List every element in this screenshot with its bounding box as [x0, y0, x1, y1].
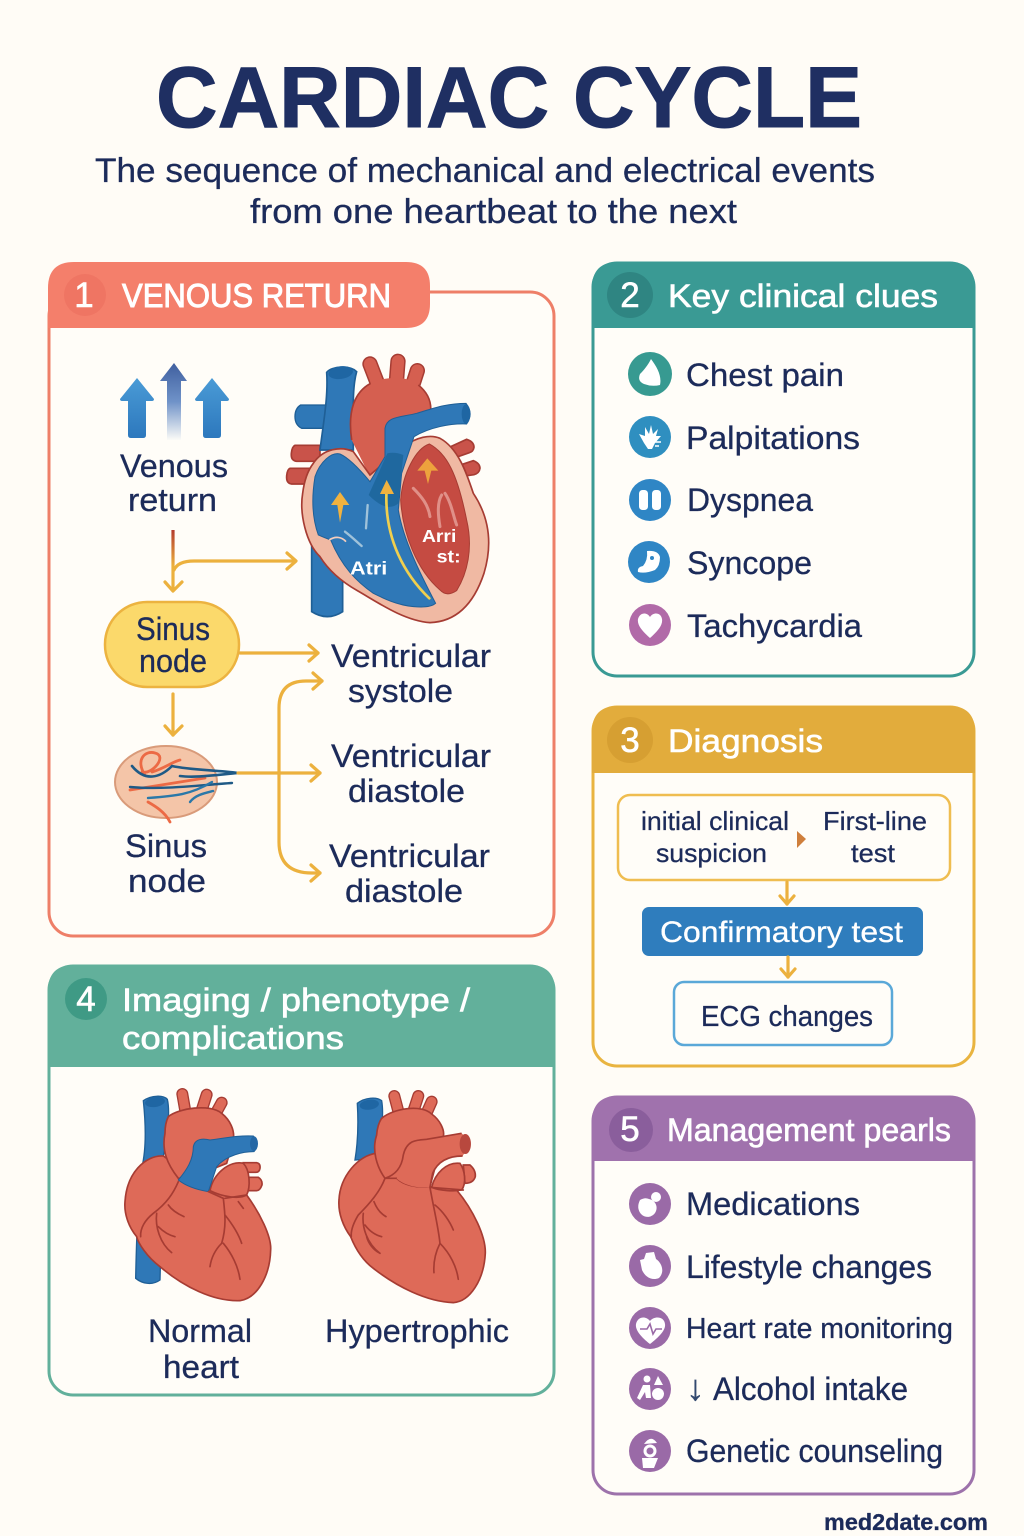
- panel 3 header: [592, 706, 975, 773]
- flow box: initial suspicion and first-line test: suspicion: [656, 838, 767, 868]
- item: genetic counseling: [629, 1430, 943, 1472]
- panel 1: venous return: [48, 262, 554, 936]
- flow box: confirmatory test: [642, 907, 923, 956]
- item: chest pain: Chest pain: [686, 357, 844, 393]
- flow box: initial suspicion and first-line test: First-line: [823, 806, 927, 836]
- panel 2 header: 2: [620, 276, 640, 315]
- label: ventricular diastole second: diastole: [345, 873, 463, 909]
- item: medications: Medications: [686, 1186, 860, 1222]
- anatomical heart cross-section: st:: [437, 547, 461, 567]
- anatomical heart cross-section: Arri: [422, 526, 456, 546]
- label: sinus node: Sinus: [125, 828, 207, 864]
- illustration: normal heart: [125, 1094, 271, 1301]
- item: tachycardia: Tachycardia: [687, 608, 862, 644]
- item: lifestyle changes: Lifestyle changes: [686, 1249, 932, 1285]
- panel 4 header: complications: [122, 1020, 344, 1056]
- arrow: fibres to ventricular diastole: [238, 765, 320, 781]
- item: palpitations: Palpitations: [686, 420, 860, 456]
- panel 3 header: 3: [620, 721, 640, 760]
- item: chest pain: [628, 352, 844, 396]
- panel 3: diagnosis: [592, 706, 975, 1066]
- item: dyspnea: [629, 479, 813, 521]
- item: lifestyle changes: [629, 1245, 932, 1287]
- item: dyspnea: Dyspnea: [687, 482, 813, 518]
- label: ventricular systole: systole: [348, 673, 453, 709]
- panel 3 header: Diagnosis: [668, 723, 823, 759]
- item: heart rate monitoring: [629, 1307, 953, 1349]
- arrow: bracket to ventricular phases: [279, 673, 322, 881]
- label: venous return: return: [128, 482, 217, 518]
- panel 5 header: Management pearls: [667, 1112, 951, 1148]
- item: alcohol intake: Alcohol intake: [713, 1371, 908, 1407]
- node: sinus node pill: node: [139, 643, 207, 679]
- label: ventricular diastole second: Ventricular: [329, 838, 490, 874]
- panel 4 header: [48, 965, 555, 1067]
- icon: venous return arrows: [120, 363, 229, 440]
- label: venous return: Venous: [120, 448, 228, 484]
- label: ventricular diastole: [331, 738, 491, 809]
- subtitle: [95, 152, 875, 231]
- arrow: sinus node to ventricular systole: [240, 645, 318, 661]
- item: tachycardia: [629, 604, 862, 646]
- item: medications: [629, 1183, 860, 1225]
- flow box: ECG changes: [674, 982, 892, 1045]
- panel 1 header: 1: [74, 276, 94, 315]
- anatomical heart cross-section: [287, 361, 489, 623]
- panel 5 header: 5: [620, 1110, 640, 1149]
- node: sinus node pill: [105, 602, 239, 687]
- flow box: confirmatory test: Confirmatory test: [660, 916, 904, 949]
- label: normal heart: Normal: [148, 1313, 252, 1349]
- item: palpitations: [629, 416, 860, 458]
- item: syncope: [628, 541, 812, 583]
- source credit: med2date.com: [824, 1509, 988, 1535]
- label: ventricular systole: [331, 638, 491, 709]
- arrow: to confirmatory test: [780, 882, 794, 904]
- label: sinus node: node: [128, 863, 206, 899]
- label: hypertrophic: Hypertrophic: [325, 1313, 509, 1349]
- subtitle: The sequence of mechanical and electrical events: [95, 152, 875, 190]
- arrow: venous return to heart and sinus node: [165, 530, 296, 591]
- flow box: initial suspicion and first-line test: initial clinical: [641, 806, 789, 836]
- panel 1 header: [48, 262, 430, 328]
- flow box: initial suspicion and first-line test: [618, 795, 950, 880]
- label: ventricular diastole second: [329, 838, 490, 909]
- item: heart rate monitoring: Heart rate monitoring: [686, 1313, 953, 1345]
- label: venous return: [120, 448, 228, 518]
- label: normal heart: heart: [163, 1349, 239, 1385]
- panel 2 header: [592, 262, 975, 328]
- label: normal heart: [148, 1313, 252, 1385]
- label: sinus node: [125, 828, 207, 899]
- title: CARDIAC CYCLE: [156, 50, 862, 146]
- panel 1 header: VENOUS RETURN: [122, 277, 391, 314]
- panel 5: management pearls: [592, 1096, 975, 1494]
- panel 2: key clinical clues: [592, 262, 975, 676]
- anatomical heart cross-section: Atri: [350, 557, 387, 578]
- label: ventricular diastole: Ventricular: [331, 738, 491, 774]
- panel 4: imaging phenotype complications: [48, 965, 555, 1395]
- panel 4 header: 4: [76, 980, 96, 1019]
- flow box: initial suspicion and first-line test: test: [851, 838, 896, 868]
- icon: conduction fibres: [115, 746, 238, 822]
- item: genetic counseling: Genetic counseling: [686, 1433, 943, 1469]
- node: sinus node pill: Sinus: [136, 611, 210, 647]
- subtitle: from one heartbeat to the next: [250, 193, 738, 231]
- arrow: to ECG changes: [781, 957, 795, 977]
- item: alcohol intake: ↓: [686, 1367, 705, 1408]
- panel 4 header: Imaging / phenotype /: [122, 982, 470, 1018]
- item: syncope: Syncope: [687, 545, 812, 581]
- label: ventricular systole: Ventricular: [331, 638, 491, 674]
- panel 5 header: [592, 1096, 975, 1161]
- panel 2 header: Key clinical clues: [668, 278, 938, 314]
- arrow: sinus node down: [165, 694, 182, 735]
- illustration: hypertrophic heart: [339, 1096, 485, 1303]
- item: alcohol intake: [629, 1367, 908, 1410]
- flow box: ECG changes: ECG changes: [701, 1001, 873, 1033]
- label: ventricular diastole: diastole: [348, 773, 465, 809]
